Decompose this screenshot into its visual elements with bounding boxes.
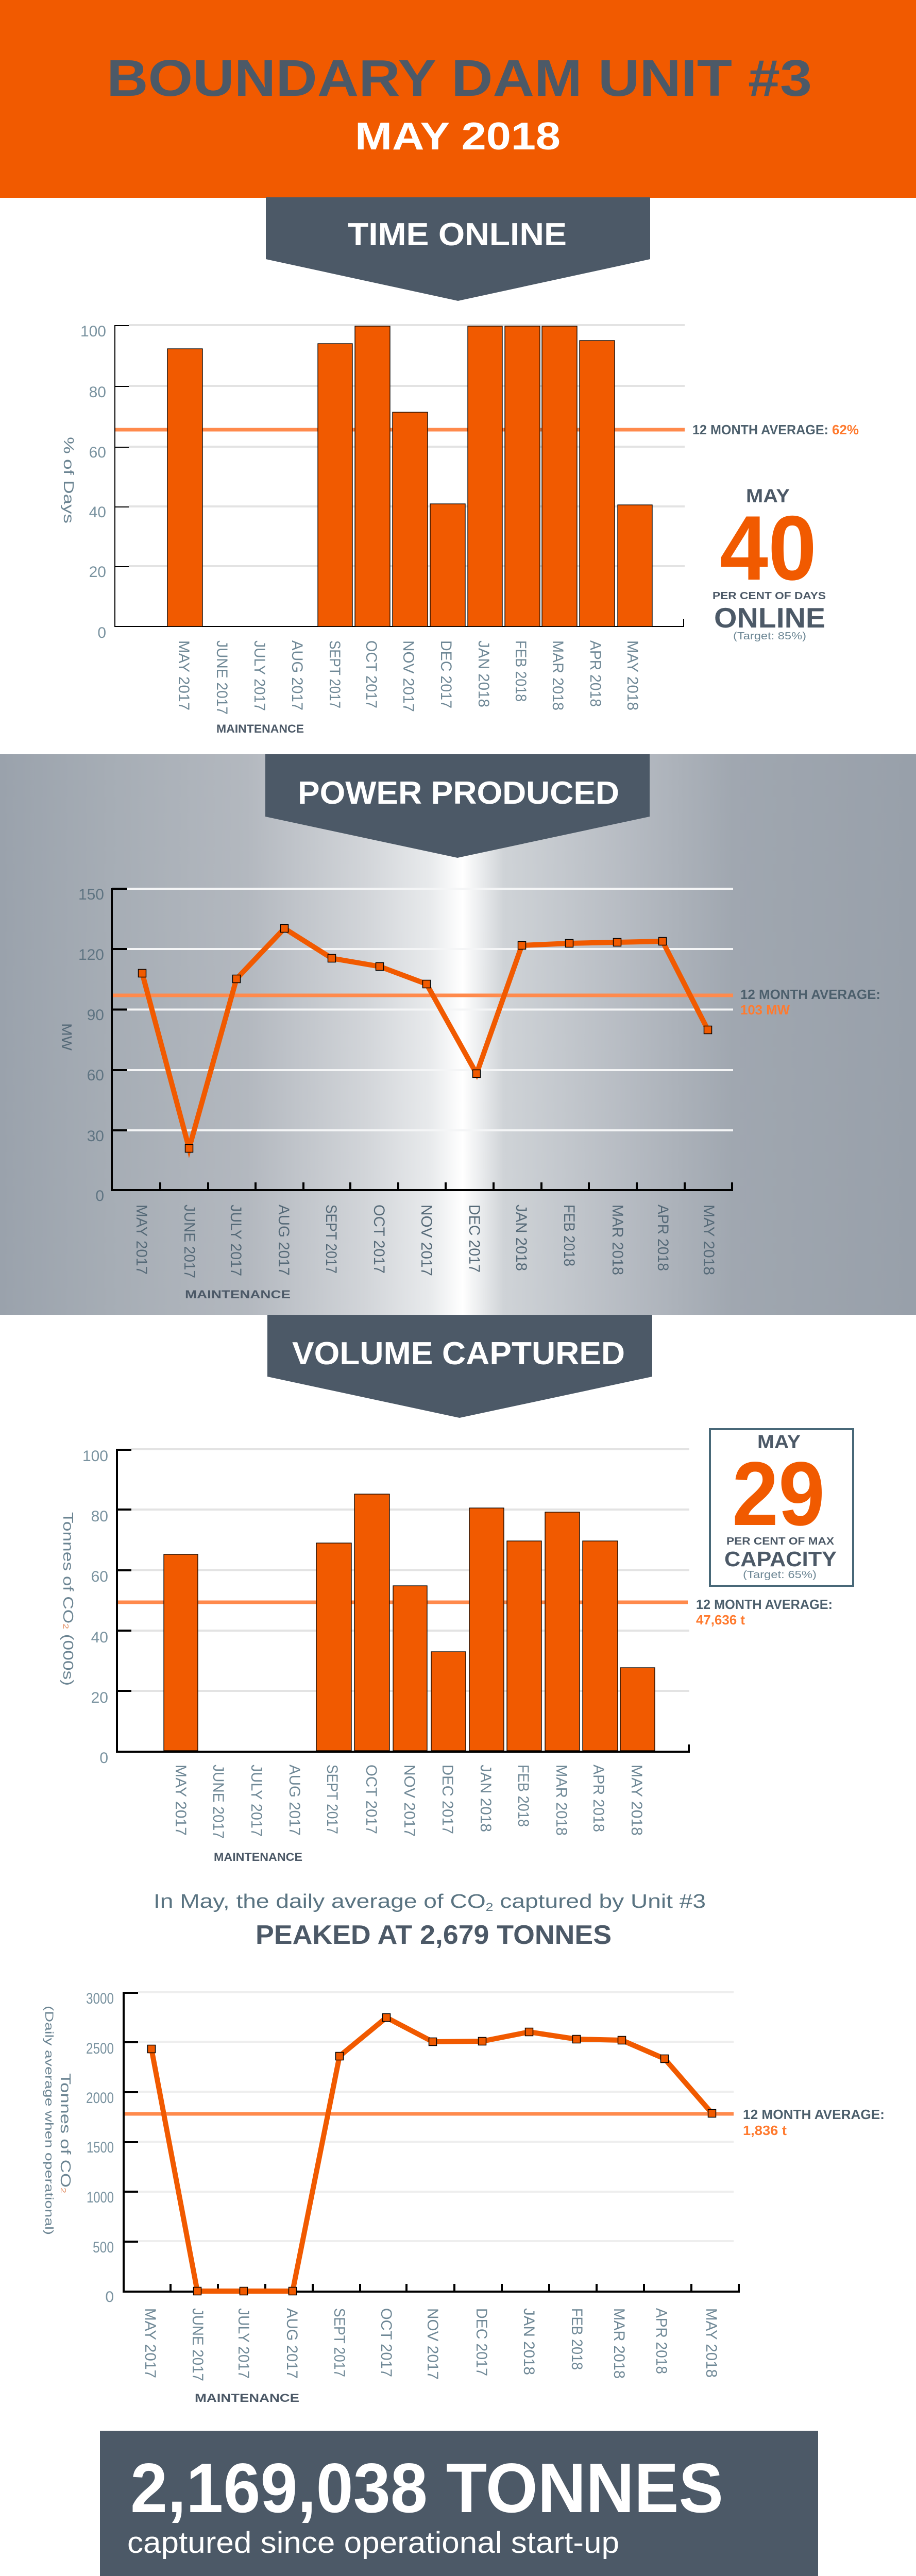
callout box: May 29 per cent capacity: PER CENT OF MAX	[726, 1536, 835, 1547]
bar chart: time online: 20	[89, 564, 106, 581]
bar chart: time online: 80	[89, 384, 106, 401]
line chart: power produced: 120	[78, 946, 104, 963]
line chart: daily average CO2: 3000	[86, 1990, 114, 2007]
bar chart: time online: 40	[89, 504, 106, 521]
line chart: power produced: APR 2018	[654, 1205, 671, 1271]
line chart: daily average CO2: MAY 2018	[703, 2308, 720, 2378]
bar chart: time online: MAINTENANCE	[216, 722, 304, 735]
bar chart: volume captured: 60	[91, 1568, 108, 1585]
line chart: daily average CO2: 500	[93, 2239, 114, 2256]
total caption: captured since operational start-up	[127, 2526, 619, 2560]
line chart: daily average CO2: DEC 2017	[473, 2308, 490, 2376]
line chart: daily average CO2	[43, 1990, 739, 2404]
line chart: daily average CO2: 0	[105, 2289, 114, 2306]
bar chart: volume captured: 80	[91, 1508, 108, 1525]
line chart: power produced: 30	[87, 1128, 104, 1145]
line chart: power produced: 60	[87, 1067, 104, 1084]
bar chart: time online: SEPT 2017	[326, 640, 343, 708]
bar chart: volume captured: 0	[99, 1750, 108, 1767]
line chart: daily average CO2: JULY 2017	[235, 2308, 252, 2379]
line chart: daily average CO2: JAN 2018	[520, 2308, 537, 2375]
line chart: power produced: JULY 2017	[227, 1205, 244, 1276]
callout: May 40 per cent online: ONLINE	[714, 602, 825, 634]
bar chart: volume captured	[60, 1448, 689, 1863]
line chart: daily average CO2: 1000	[87, 2189, 114, 2206]
panel: power produced background	[0, 754, 916, 1315]
subtitle: date: MAY 2018	[355, 114, 561, 158]
line chart: daily average CO2: MAINTENANCE	[195, 2392, 299, 2404]
average label: daily average CO2	[743, 2107, 885, 2138]
bar chart: volume captured: FEB 2018	[515, 1765, 532, 1827]
bar chart: time online: APR 2018	[587, 640, 604, 707]
bar chart: volume captured: 100	[82, 1448, 108, 1465]
bar chart: volume captured: JAN 2018	[477, 1765, 494, 1832]
bar chart: time online: MAY 2018	[624, 640, 641, 710]
bar chart: volume captured: APR 2018	[590, 1765, 607, 1832]
total tonnes figure: 2,169,038 TONNES	[130, 2449, 723, 2527]
callout box: May 29 per cent capacity: 29	[732, 1444, 825, 1545]
bar chart: time online: NOV 2017	[400, 640, 417, 712]
average label: daily average CO2: 12 MONTH AVERAGE:	[743, 2107, 885, 2122]
callout box: May 29 per cent capacity	[710, 1429, 853, 1586]
callout box: May 29 per cent capacity: (Target: 65%)	[743, 1569, 817, 1581]
line chart: daily average CO2: SEPT 2017	[331, 2308, 348, 2377]
bar chart: time online: 0	[97, 624, 106, 641]
bar chart: volume captured: MAY 2018	[628, 1765, 645, 1836]
line chart: power produced: 90	[87, 1007, 104, 1024]
bar chart: volume captured: 40	[91, 1629, 108, 1646]
average label: volume captured: 12 MONTH AVERAGE:	[696, 1597, 833, 1612]
bar chart: volume captured: MAY 2017	[172, 1765, 189, 1836]
line chart: daily average CO2: 1500	[87, 2139, 114, 2156]
line chart: daily average CO2: NOV 2017	[424, 2308, 441, 2380]
bar chart: volume captured: AUG 2017	[286, 1765, 303, 1836]
callout box: May 29 per cent capacity: CAPACITY	[724, 1547, 837, 1571]
line chart: daily average CO2: MAR 2018	[610, 2308, 627, 2379]
section banner: volume captured: VOLUME CAPTURED	[292, 1336, 625, 1371]
bar chart: time online: JAN 2018	[475, 640, 492, 707]
line chart: power produced: MW	[59, 1023, 75, 1051]
bar chart: volume captured: OCT 2017	[363, 1765, 380, 1834]
line chart: power produced: JUNE 2017	[181, 1205, 198, 1278]
average label: power produced: 12 MONTH AVERAGE:	[740, 987, 880, 1002]
line chart: power produced: AUG 2017	[275, 1205, 292, 1276]
line chart: power produced: MAR 2018	[609, 1205, 626, 1275]
line chart: daily average CO2: Tonnes of CO 2	[58, 2073, 74, 2193]
bar chart: time online: % of Days	[61, 437, 77, 523]
section banner: time online	[266, 197, 650, 301]
bar chart: volume captured: JULY 2017	[248, 1765, 265, 1837]
line chart: power produced: JAN 2018	[513, 1205, 530, 1271]
text block: daily average statement: captured by Unit #3	[494, 1891, 706, 1912]
section banner: power produced	[265, 754, 650, 858]
text block: daily average statement	[154, 1891, 706, 1950]
line chart: power produced: SEPT 2017	[323, 1205, 340, 1274]
bar chart: volume captured: NOV 2017	[401, 1765, 418, 1837]
bar chart: time online: MAY 2017	[175, 640, 192, 710]
bar chart: volume captured: DEC 2017	[439, 1765, 456, 1834]
panel: total captured	[100, 2431, 818, 2576]
line chart: power produced: MAY 2017	[133, 1205, 150, 1275]
line chart: daily average CO2: 2500	[86, 2040, 114, 2057]
header band	[0, 0, 916, 198]
line chart: daily average CO2: (Daily average when operational)	[43, 2006, 56, 2235]
bar chart: time online: MAR 2018	[549, 640, 566, 710]
section banner: volume captured	[267, 1315, 652, 1418]
text block: daily average statement: In May, the daily average of CO	[154, 1891, 428, 1912]
bar chart: volume captured: MAR 2018	[553, 1765, 570, 1836]
line chart: power produced: MAINTENANCE	[185, 1288, 291, 1301]
title: BOUNDARY DAM UNIT #3	[107, 49, 812, 107]
bar chart: time online: FEB 2018	[512, 640, 529, 702]
bar chart: volume captured: JUNE 2017	[210, 1765, 227, 1839]
average label: volume captured	[696, 1597, 833, 1628]
callout: May 40 per cent online: 40	[720, 497, 817, 599]
line chart: power produced: NOV 2017	[418, 1205, 435, 1276]
line chart: daily average CO2: OCT 2017	[378, 2308, 395, 2377]
line chart: daily average CO2: AUG 2017	[283, 2308, 300, 2379]
bar chart: time online: 100	[80, 323, 106, 340]
line chart: power produced: DEC 2017	[466, 1205, 483, 1273]
bar chart: volume captured: MAINTENANCE	[214, 1851, 302, 1863]
average label: daily average CO2: 1,836 t	[743, 2123, 787, 2138]
line chart: power produced	[59, 886, 733, 1301]
average label: time online: 62%	[832, 422, 859, 437]
section banner: time online: TIME ONLINE	[348, 217, 567, 252]
bar chart: time online: 60	[89, 444, 106, 461]
line chart: daily average CO2: FEB 2018	[568, 2308, 585, 2370]
average label: power produced: 103 MW	[740, 1002, 790, 1018]
line chart: daily average CO2: MAY 2017	[142, 2308, 159, 2378]
bar chart: volume captured: Tonnes of CO 2 (000s)	[60, 1512, 76, 1686]
text block: daily average statement: 2	[486, 1901, 494, 1913]
line chart: power produced: FEB 2018	[561, 1205, 578, 1266]
average label: power produced	[740, 987, 880, 1018]
bar chart: time online: JULY 2017	[251, 640, 268, 711]
line chart: power produced: OCT 2017	[370, 1205, 387, 1274]
line chart: daily average CO2: 2000	[86, 2090, 114, 2107]
bar chart: time online: OCT 2017	[363, 640, 380, 708]
line chart: power produced: 0	[95, 1188, 104, 1205]
bar chart: time online	[61, 323, 685, 735]
bar chart: time online: JUNE 2017	[213, 640, 230, 715]
callout box: May 29 per cent capacity: MAY	[757, 1431, 801, 1452]
bar chart: time online: DEC 2017	[437, 640, 454, 708]
average label: time online: 12 MONTH AVERAGE:	[692, 422, 828, 437]
bar chart: volume captured: 20	[91, 1689, 108, 1706]
line chart: daily average CO2: APR 2018	[653, 2308, 670, 2374]
bar chart: time online: AUG 2017	[289, 640, 306, 710]
callout: May 40 per cent online	[713, 485, 826, 642]
text block: daily average statement: PEAKED AT 2,679 TONNES	[256, 1920, 612, 1950]
section banner: power produced: POWER PRODUCED	[298, 775, 619, 811]
callout: May 40 per cent online: PER CENT OF DAYS	[713, 590, 826, 602]
callout: May 40 per cent online: (Target: 85%)	[733, 631, 806, 642]
line chart: power produced: MAY 2018	[700, 1205, 717, 1275]
bar chart: volume captured: SEPT 2017	[324, 1765, 341, 1834]
average label: volume captured: 47,636 t	[696, 1612, 745, 1628]
line chart: power produced: 150	[78, 886, 104, 903]
line chart: daily average CO2: JUNE 2017	[189, 2308, 206, 2381]
callout: May 40 per cent online: MAY	[746, 485, 790, 506]
